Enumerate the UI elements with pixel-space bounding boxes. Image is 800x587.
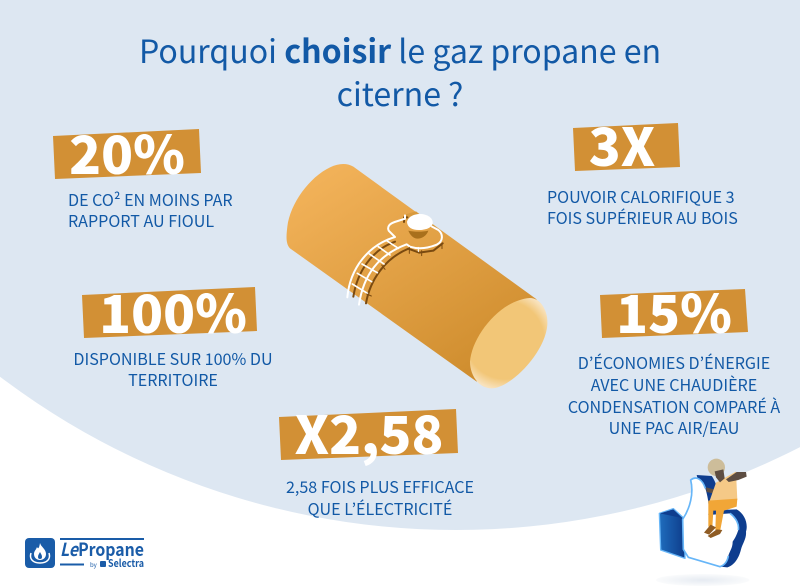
stat: 100%: 100% <box>99 273 247 349</box>
stat: 15% <box>568 273 780 439</box>
stat: 3X: FOIS SUPÉRIEUR AU BOIS <box>547 205 738 229</box>
logo: LePropane by Selectra: LePropane <box>60 536 144 562</box>
stat: 15%: 15% <box>616 273 732 349</box>
stat: X2,58: X2,58 <box>295 394 443 470</box>
stat: 3X: 3X <box>589 106 655 182</box>
stat: X2,58 <box>279 394 474 520</box>
stat: 20%: RAPPORT AU FIOUL <box>68 208 214 232</box>
logo icon: flame <box>25 538 55 568</box>
title: citerne ? <box>337 70 463 116</box>
logo: LePropane by Selectra: Selectra <box>108 556 144 571</box>
stat: 20%: 20% <box>69 114 185 190</box>
stat: 20%: DE CO² EN MOINS PAR <box>68 187 233 211</box>
illustration: propane tank <box>287 164 547 388</box>
stat: X2,58: 2,58 FOIS PLUS EFFICACE <box>286 474 474 498</box>
stat: 3X <box>547 106 738 229</box>
stat: 100%: DISPONIBLE SUR 100% DU <box>73 346 273 370</box>
stat: 15%: AVEC UNE CHAUDIÈRE <box>591 372 757 396</box>
stat: 20% <box>53 114 233 232</box>
stat: 15%: CONDENSATION COMPARÉ À <box>568 394 780 418</box>
stat: 100%: TERRITOIRE <box>128 367 218 391</box>
logo: LePropane by Selectra <box>25 536 144 571</box>
stat: 15%: D’ÉCONOMIES D’ÉNERGIE <box>578 350 770 374</box>
logo: LePropane by Selectra: by <box>90 560 98 569</box>
person <box>704 459 747 538</box>
illustration: thumbs up with person <box>656 459 749 586</box>
stat: X2,58: QUE L’ÉLECTRICITÉ <box>308 496 452 520</box>
stat: 100% <box>73 273 273 391</box>
stat: 3X: POUVOIR CALORIFIQUE 3 <box>547 184 735 208</box>
title: Pourquoi choisir le gaz propane en <box>139 27 661 73</box>
stat: 15%: UNE PAC AIR/EAU <box>609 415 739 439</box>
